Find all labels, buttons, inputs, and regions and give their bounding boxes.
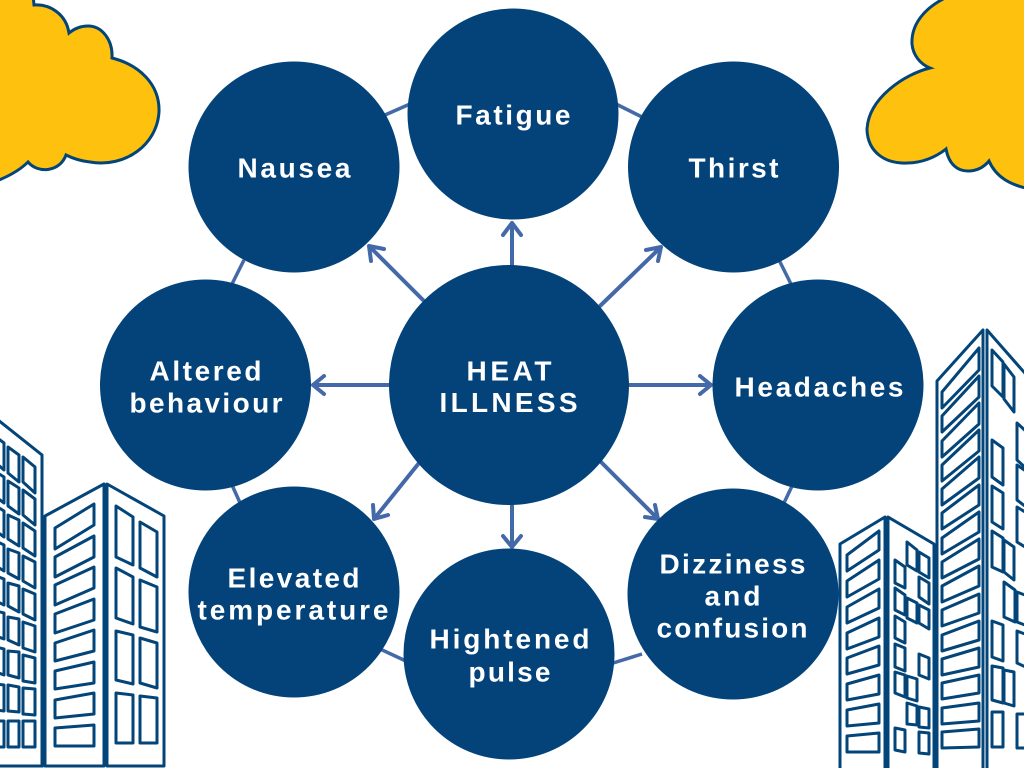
circle: Altered behaviour: behaviour (130, 388, 283, 418)
arrow: to Hightened pulse (503, 504, 521, 547)
connecting ring between outer circles (232, 104, 793, 664)
cloud: top left (0, 0, 159, 182)
building: right medium tower (840, 517, 934, 768)
building: right tall tower (937, 330, 1024, 768)
circle: Headaches: Headaches (734, 372, 904, 402)
circle: Nausea (188, 62, 400, 272)
building: far left tower (0, 420, 42, 766)
circle: Altered behaviour: Altered (150, 356, 262, 386)
circle: Thirst: Thirst (688, 152, 778, 184)
circle: Dizziness and confusion: confusion (656, 612, 808, 644)
circle: Fatigue: Fatigue (456, 100, 570, 130)
circle: Fatigue (408, 8, 618, 220)
arrow: to Dizziness and confusion (601, 462, 658, 519)
circle: Hightened pulse: Hightened (430, 624, 590, 654)
circle: Nausea: Nausea (238, 152, 351, 184)
center circle: Heat Illness: HEAT (466, 356, 552, 386)
circle: Dizziness and confusion: and (704, 580, 760, 612)
cloud: top right (867, 0, 1024, 189)
circle: Dizziness and confusion (628, 488, 838, 700)
arrow: to Fatigue (503, 223, 521, 266)
circle: Dizziness and confusion: Dizziness (660, 548, 806, 580)
arrow: to Thirst (600, 247, 661, 306)
circle: Elevated temperature (188, 486, 400, 698)
arrow: to Elevated temperature (373, 463, 419, 519)
center circle: Heat Illness (389, 265, 629, 505)
circle: Headaches (712, 280, 924, 490)
circle: Thirst (628, 62, 839, 272)
circle: Hightened pulse: pulse (468, 656, 550, 688)
building: second left tower (45, 484, 164, 766)
circle: Elevated temperature: Elevated (228, 562, 360, 594)
circle: Hightened pulse (404, 548, 614, 760)
circle: Elevated temperature: temperature (198, 594, 388, 626)
center circle: Heat Illness: ILLNESS (440, 387, 578, 418)
arrow: to Altered behaviour (313, 376, 390, 394)
circle: Altered behaviour (100, 280, 311, 490)
arrow: to Headaches (628, 376, 711, 394)
arrow: to Nausea (369, 246, 423, 300)
